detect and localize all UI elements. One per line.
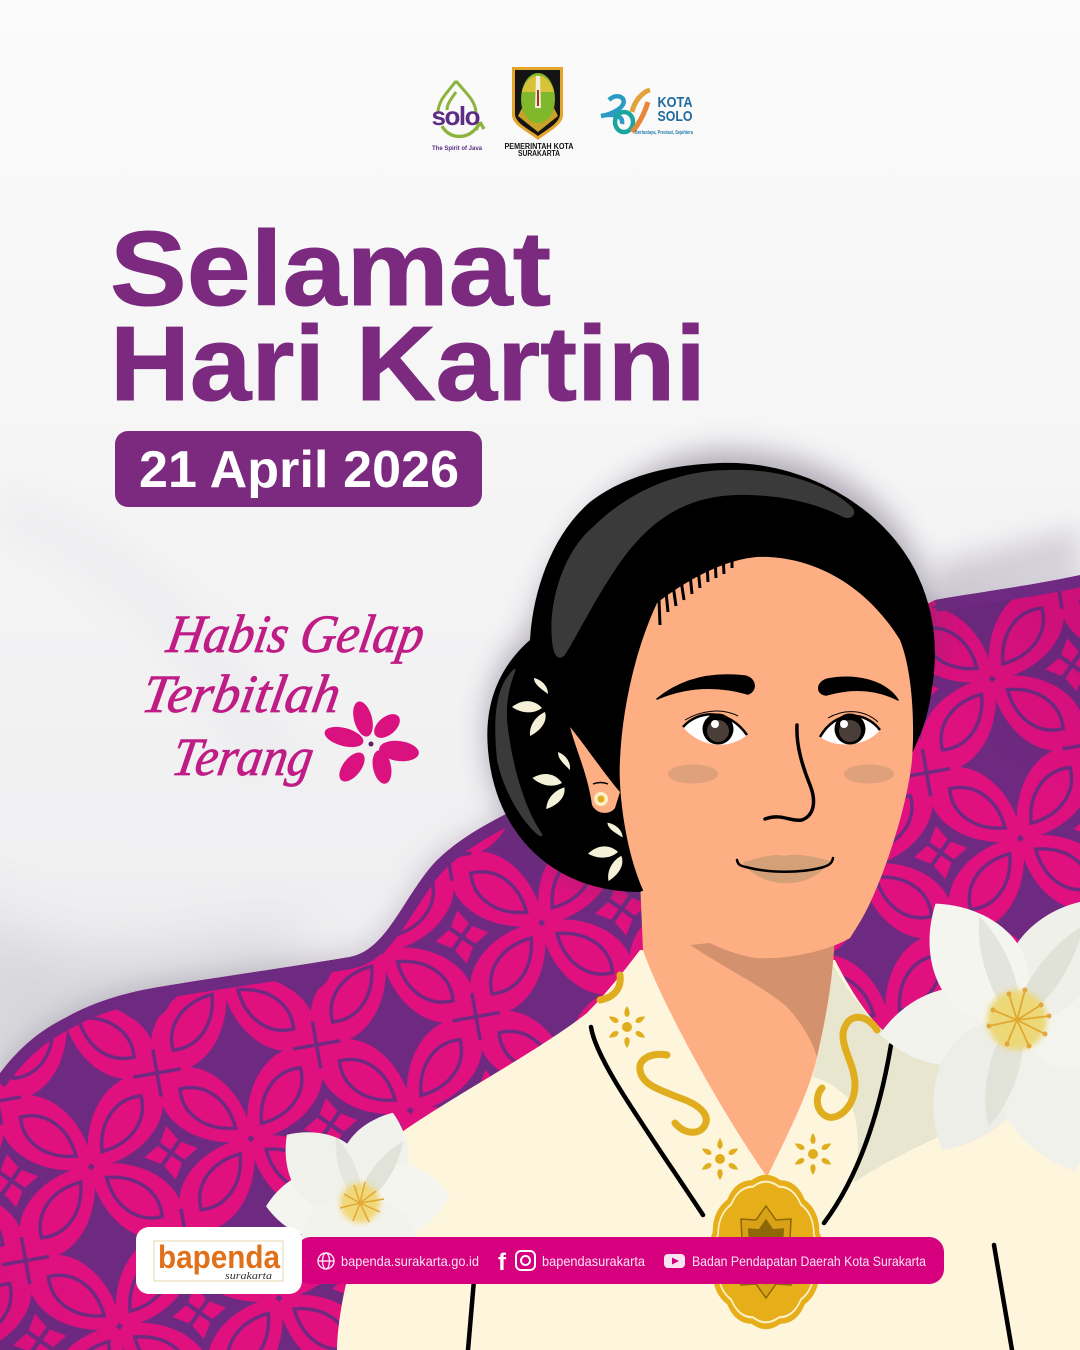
ear	[570, 727, 620, 813]
collar shadow	[813, 965, 947, 1183]
brooch	[709, 1175, 823, 1329]
title: Hari Kartini	[110, 305, 706, 423]
face	[620, 557, 913, 958]
neck shadow	[690, 930, 835, 1057]
script tagline	[138, 604, 429, 787]
hair shadow	[487, 450, 935, 895]
gold flowers	[607, 1006, 833, 1180]
right eyebrow	[819, 677, 898, 700]
title: Selamat	[110, 210, 551, 328]
date badge: 21 April 2026	[139, 441, 459, 499]
flower: large white jasmine	[876, 878, 1080, 1188]
logo: 281 Kota Solo	[601, 90, 694, 136]
flower: small white jasmine	[263, 1101, 453, 1298]
hairline strands	[659, 552, 888, 625]
illustration: Kartini	[337, 463, 1080, 1350]
collar outlines	[468, 1027, 1012, 1350]
logo: bapenda card	[136, 1227, 302, 1294]
script tagline: Habis Gelap	[162, 604, 429, 664]
icon: youtube	[664, 1254, 685, 1268]
logo: crest Pemerintah Kota Surakarta: PEMERINTAH KOTA	[504, 142, 574, 151]
logo: bapenda card: bapenda	[158, 1239, 280, 1275]
logo: bapenda card: surakarta	[225, 1271, 272, 1282]
right eye	[820, 712, 880, 745]
title	[110, 210, 706, 423]
icon: globe	[318, 1253, 334, 1269]
bun highlight	[495, 669, 542, 836]
kebaya body	[337, 950, 1080, 1350]
nose	[765, 725, 814, 820]
logo: 281 Kota Solo: SOLO	[658, 108, 693, 125]
date badge	[115, 431, 482, 507]
panel: purple batik wave	[0, 570, 1080, 1350]
logo: Solo The Spirit of Java	[432, 81, 484, 152]
hair flowers	[512, 678, 626, 883]
hair highlight top	[551, 470, 854, 658]
logo: Solo The Spirit of Java: solo	[432, 101, 480, 131]
logos row	[432, 67, 694, 158]
neck	[640, 880, 860, 1177]
left eyebrow	[657, 675, 754, 699]
lips	[743, 855, 830, 883]
mouth	[737, 858, 833, 872]
earring	[593, 782, 608, 806]
icon: instagram	[516, 1251, 535, 1270]
logo: crest Pemerintah Kota Surakarta: SURAKARTA	[518, 149, 560, 158]
left eye	[683, 711, 747, 745]
script tagline: Terbitlah	[138, 664, 345, 724]
logo: 281 Kota Solo: Berbudaya, Prestasi, Sejahtera	[635, 130, 694, 136]
footer bar	[296, 1237, 944, 1284]
script tagline: Terang	[168, 727, 318, 787]
hair	[487, 463, 935, 892]
agency name: Badan Pendapatan Daerah Kota Surakarta	[692, 1253, 926, 1269]
blush	[668, 764, 894, 784]
icon: pink flower	[322, 699, 420, 786]
icon: facebook: f	[498, 1249, 507, 1276]
website: bapenda.surakarta.go.id	[341, 1253, 479, 1269]
social handle: bapendasurakarta	[542, 1253, 645, 1269]
collar gold ornaments	[600, 975, 877, 1132]
panel shadow	[0, 572, 1080, 1140]
logo: Solo The Spirit of Java: The Spirit of Java	[432, 146, 483, 152]
logo: 281 Kota Solo: KOTA	[658, 94, 693, 111]
logo: crest Pemerintah Kota Surakarta	[504, 67, 574, 158]
